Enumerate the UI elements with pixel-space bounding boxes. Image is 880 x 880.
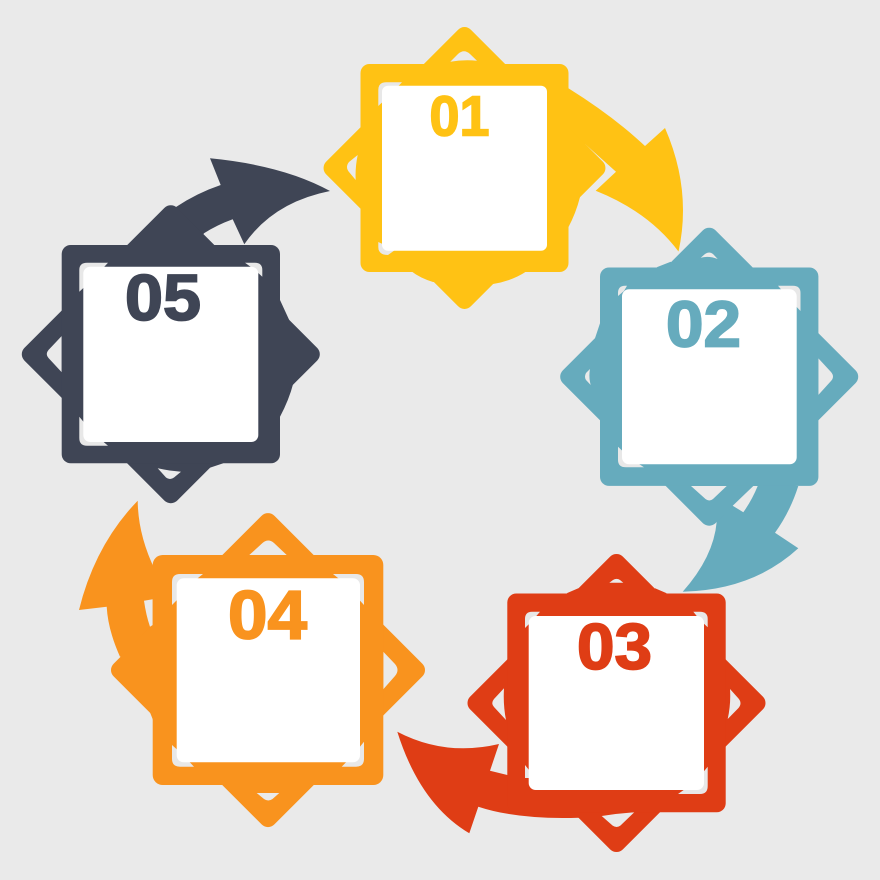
square frame: teal (600, 268, 818, 486)
white content card 01 (382, 86, 547, 251)
square frame: dark (62, 245, 280, 463)
white content card 05 (83, 267, 258, 442)
white content card 03 (529, 616, 704, 790)
ring segments: red (567, 588, 667, 600)
arrow: red curved arrow to step 04 (397, 732, 640, 833)
panel: step 05 (18, 158, 330, 507)
diamond openings: red (492, 579, 740, 827)
diamond: yellow (320, 23, 609, 313)
square frame: red (507, 594, 726, 812)
white content card 02 (622, 289, 797, 464)
diamond: dark (18, 201, 324, 507)
corner gaps: yellow (378, 82, 402, 255)
ring segments: yellow (411, 197, 580, 284)
corner gaps: orange (172, 574, 364, 767)
diamond: orange (107, 509, 429, 831)
diamond: red (464, 550, 769, 856)
number 05: 05 (125, 261, 201, 334)
diamond openings: orange (144, 540, 398, 800)
panel: step 02 (556, 224, 862, 592)
panel: step 03 (397, 550, 769, 856)
number 01: 01 (430, 84, 490, 148)
corner gaps: teal (618, 286, 800, 467)
ring segments: dark (208, 300, 293, 468)
square frame: orange (153, 555, 383, 785)
arrow: dark curved arrow to step 01 (150, 158, 330, 255)
panel: step 04 (79, 501, 429, 831)
white content card 04 (177, 578, 360, 762)
arrow: yellow curved arrow to step 02 (540, 88, 683, 252)
arrow: teal curved arrow to step 03 (683, 470, 798, 592)
number 02: 02 (666, 288, 741, 360)
ring segments: teal (595, 262, 680, 345)
diamond openings: yellow (347, 51, 477, 180)
corner gaps: dark (79, 263, 262, 446)
diamond openings: dark (47, 336, 181, 479)
diamond openings: teal (585, 252, 833, 512)
panel: step 01 (320, 23, 683, 313)
arrow: orange curved arrow to step 05 (79, 501, 170, 657)
ring segments: orange (147, 700, 165, 720)
number 03: 03 (577, 610, 652, 683)
square frame: yellow (360, 64, 568, 272)
number 04: 04 (228, 576, 307, 654)
diamond: teal (556, 224, 862, 529)
corner gaps: red (525, 612, 708, 794)
